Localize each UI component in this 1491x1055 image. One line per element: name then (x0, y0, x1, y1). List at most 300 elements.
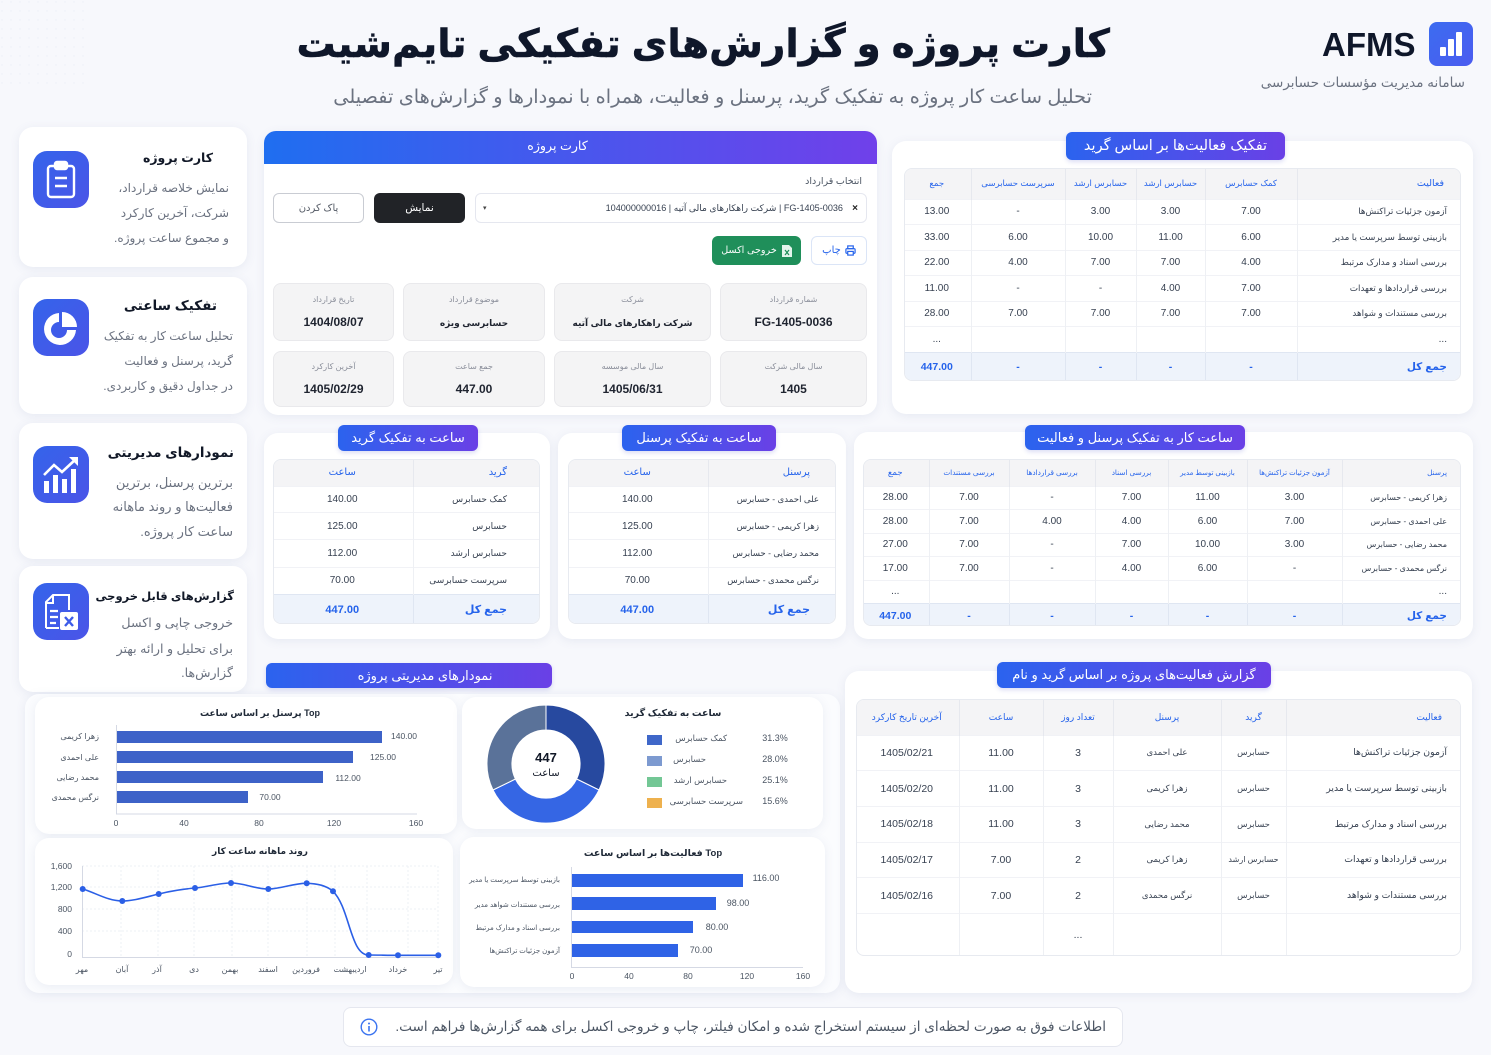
footer text: اطلاعات فوق به صورت لحظه‌ای از سیستم استخراج شده و امکان فیلتر، چاپ و خروجی اکسل برای همه گزارش‌ها فراهم است. (395, 1019, 1106, 1034)
table: hours by personnel and activity: - (1050, 563, 1054, 574)
button: excel export (712, 236, 801, 265)
footer note (343, 1007, 1123, 1047)
table: hours by grade: 70.00 (330, 575, 355, 586)
chart: top activities by hours: بررسی مستندات شواهد مدیر (474, 902, 560, 909)
card description (116, 616, 233, 680)
table: hours by grade (273, 459, 540, 624)
table: activity by grade: 28.00 (924, 308, 949, 319)
info: contract subject: حسابرسی ویژه (440, 318, 508, 328)
button: print: چاپ (822, 245, 841, 256)
table: hours by grade: حسابرس (472, 520, 507, 530)
table: project activity report: 11.00 (988, 818, 1014, 830)
table: hours by grade: 112.00 (327, 548, 357, 559)
table: activity by grade: بررسی اسناد و مدارک مرتبط (1341, 257, 1447, 267)
sidebar card: project card (19, 127, 247, 267)
table: project activity report: زهرا کریمی (1146, 854, 1188, 864)
chart: monthly work hours trend: 800 (58, 904, 72, 914)
chart: monthly work hours trend: مهر (75, 965, 88, 974)
panel: project activity report (845, 671, 1472, 993)
table: hours by grade: سرپرست حسابرسی (429, 575, 507, 585)
table: hours by personnel and activity: - (1293, 563, 1296, 574)
info: contract number: FG-1405-0036 (754, 315, 833, 329)
chart: monthly work hours trend: 1,200 (51, 882, 72, 892)
table: hours by personnel and activity: بازبینی توسط مدیر (1180, 470, 1235, 477)
info: firm fiscal year (554, 351, 711, 407)
table: activity by grade: 11.00 (1158, 232, 1183, 243)
table: project activity report: زهرا کریمی (1146, 783, 1188, 793)
info: company: شرکت (621, 295, 644, 304)
panel: project management charts (25, 694, 840, 993)
chart: monthly work hours trend: 400 (58, 926, 72, 936)
sidebar card: exportable reports (19, 566, 247, 692)
table: hours by personnel: 140.00 (622, 494, 653, 505)
logo icon (1429, 22, 1473, 66)
subtitle: تحلیل ساعت کار پروژه به تفکیک گرید، پرسنل و فعالیت، همراه با نمودارها و گزارش‌های تفصیلی (333, 87, 1092, 108)
chart: hours by grade donut: 447 (535, 750, 557, 765)
table: activity by grade: بازبینی توسط سرپرست یا مدیر (1333, 232, 1447, 242)
card description: شرکت، آخرین کارکرد (121, 206, 229, 220)
button: clear (273, 193, 364, 223)
table: hours by personnel and activity: - (1050, 610, 1054, 622)
icon: clipboard (33, 151, 89, 208)
table: activity by grade: 7.00 (1091, 308, 1110, 319)
panel header: project card (264, 131, 877, 164)
logo caption: سامانه مدیریت مؤسسات حسابرسی (1261, 75, 1465, 90)
table: activity by grade: 6.00 (1241, 232, 1261, 243)
table: hours by personnel: علی احمدی - حسابرس (737, 494, 819, 504)
chart: top activities by hours: 160 (796, 971, 810, 981)
chart: top personnel by hours: محمد رضایی (57, 773, 99, 782)
chart: top activities by hours: بازبینی توسط سرپرست یا مدیر (468, 877, 560, 884)
chart: monthly work hours trend: اسفند (258, 965, 278, 974)
card description: تحلیل ساعت کار به تفکیک (104, 329, 233, 343)
card description: در جداول دقیق و کاربردی. (103, 379, 233, 393)
table: activity by grade: 3.00 (1091, 206, 1110, 217)
table: project activity report: 1405/02/20 (880, 783, 933, 795)
card heading: کارت پروژه (143, 151, 213, 165)
card description: خروجی چاپی و اکسل (121, 616, 233, 630)
table: hours by personnel and activity: 4.00 (1042, 516, 1062, 527)
card description: برای تحلیل و ارائه بهتر (117, 642, 233, 656)
table: hours by personnel (568, 459, 836, 624)
card description: گرید، پرسنل و فعالیت (124, 354, 233, 368)
info: contract date (273, 283, 394, 341)
chart: top personnel by hours (35, 697, 457, 834)
table: hours by grade: 447.00 (325, 604, 359, 616)
info: company fiscal year: سال مالی شرکت (764, 362, 822, 371)
panel: hours by personnel and activity (854, 432, 1473, 639)
table: project activity report: 2 (1075, 854, 1081, 866)
table: hours by personnel and activity: - (1050, 539, 1054, 550)
table: hours by personnel and activity: جمع کل (1407, 610, 1447, 622)
info: total hours (403, 351, 545, 407)
table: hours by personnel and activity: - (1050, 492, 1054, 503)
heading: project management charts: نمودارهای مدیریتی پروژه (358, 668, 492, 682)
table: hours by personnel and activity: - (1130, 610, 1133, 622)
table: hours by personnel and activity: 7.00 (959, 516, 979, 527)
table: hours by personnel and activity: بررسی مستندات (943, 468, 995, 477)
chart: top personnel by hours: 70.00 (259, 792, 281, 802)
chart: hours by grade donut: کمک حسابرس (675, 733, 728, 743)
table: hours by personnel: 70.00 (625, 575, 650, 586)
chart: hours by grade donut: ساعت (532, 768, 560, 779)
chart: top activities by hours: 120 (740, 971, 754, 981)
table: project activity report: ساعت (989, 712, 1013, 722)
contract selector: ▾ (483, 205, 487, 212)
table: project activity report: بازبینی توسط سرپرست یا مدیر (1326, 783, 1447, 793)
table: hours by personnel and activity: 27.00 (883, 539, 908, 550)
table: project activity report: بررسی مستندات و شواهد (1347, 890, 1447, 900)
table: hours by personnel and activity: 11.00 (1195, 492, 1220, 503)
heading: hours by personnel (622, 425, 776, 451)
card description: ساعت کار پروژه. (140, 524, 233, 539)
table: hours by grade: ساعت (329, 467, 356, 478)
heading: project activity report (997, 662, 1271, 688)
heading: hours by personnel and activity (1025, 425, 1245, 450)
table: activity by grade: 11.00 (925, 283, 949, 294)
info: last work (273, 351, 394, 407)
table: project activity report (856, 699, 1461, 956)
table: hours by personnel: نرگس محمدی - حسابرس (727, 575, 819, 585)
table: project activity report: 3 (1075, 818, 1081, 830)
table: hours by personnel and activity: 7.00 (959, 492, 979, 503)
table: activity by grade: 4.00 (1008, 257, 1028, 268)
table: hours by grade: جمع کل (465, 604, 507, 616)
table: project activity report: 1405/02/16 (880, 890, 933, 902)
chart: monthly work hours trend: اردیبهشت (334, 965, 366, 974)
chart: monthly work hours trend: 0 (67, 949, 72, 959)
info: contract date: 1404/08/07 (303, 315, 364, 329)
table: hours by personnel and activity: 3.00 (1285, 492, 1304, 503)
table: hours by personnel and activity: پرسنل (1427, 468, 1447, 477)
table: hours by personnel and activity: علی احمدی - حسابرس (1370, 517, 1447, 526)
table: project activity report: حسابرس (1237, 783, 1270, 793)
chart: hours by grade donut: 25.1% (762, 775, 788, 785)
table: activity by grade: 7.00 (1241, 308, 1261, 319)
chart: top activities by hours: 80.00 (706, 922, 728, 932)
card description: برترین پرسنل، برترین (116, 475, 233, 490)
panel: hours by grade (264, 433, 550, 639)
table: hours by grade: حسابرس ارشد (451, 548, 507, 558)
table: activity by grade: 22.00 (924, 257, 949, 268)
heading: hours by grade (338, 425, 478, 451)
chart: top personnel by hours: 140.00 (391, 731, 417, 741)
chart: top activities by hours: Top فعالیت‌ها بر اساس ساعت (584, 848, 722, 859)
table: activity by grade: جمع کل (1407, 361, 1447, 373)
table: project activity report: 7.00 (991, 854, 1011, 866)
chart: monthly work hours trend: 1,600 (51, 861, 72, 871)
table: hours by personnel and activity: ... (1439, 586, 1447, 597)
table: project activity report: 11.00 (988, 747, 1014, 759)
table: activity by grade: بررسی مستندات و شواهد (1352, 308, 1447, 318)
chart: top activities by hours: 40 (624, 971, 634, 981)
table: activity by grade: - (1249, 361, 1253, 373)
panel: activity by grade (892, 141, 1473, 414)
table: activity by grade: 447.00 (921, 361, 953, 373)
heading: activity by grade (1066, 132, 1285, 160)
logo: AFMS brand (1261, 22, 1473, 90)
table: project activity report: بررسی اسناد و مدارک مرتبط (1335, 819, 1447, 829)
table: activity by grade: 7.00 (1008, 308, 1028, 319)
table: hours by grade: گرید (489, 467, 507, 478)
table: hours by personnel and activity: آزمون جزئیات تراکنش‌ها (1259, 470, 1330, 477)
heading: project activity report: گزارش فعالیت‌های پروژه بر اساس گرید و نام (1012, 667, 1256, 682)
info: company fiscal year (720, 351, 867, 407)
table: hours by personnel and activity: محمد رضایی - حسابرس (1366, 540, 1447, 549)
contract selector: × (852, 203, 858, 214)
chart: top personnel by hours: علی احمدی (60, 753, 99, 762)
table: hours by personnel and activity (863, 459, 1461, 626)
table: hours by personnel: 112.00 (622, 548, 652, 559)
info: firm fiscal year: 1405/06/31 (602, 382, 663, 396)
table: activity by grade: سرپرست حسابرسی (981, 178, 1055, 188)
table: hours by personnel and activity: 7.00 (959, 563, 979, 574)
table: hours by personnel and activity: 17.00 (883, 563, 908, 574)
chart: top activities by hours: 98.00 (727, 898, 749, 908)
chart: monthly work hours trend: خرداد (389, 965, 407, 974)
contract selector: FG-1405-0036 | شرکت راهکارهای مالی آتیه | 104000000016 (606, 203, 843, 213)
table: project activity report: 3 (1075, 747, 1081, 759)
table: activity by grade: کمک حسابرس (1225, 178, 1277, 188)
table: hours by personnel and activity: 3.00 (1285, 539, 1304, 550)
info: company: شرکت راهکارهای مالی آتیه (573, 318, 692, 328)
info: contract subject (403, 283, 545, 341)
table: activity by grade: 7.00 (1161, 257, 1180, 268)
chart: monthly work hours trend (35, 838, 453, 985)
chart: top activities by hours: 80 (683, 971, 693, 981)
table: project activity report: نرگس محمدی (1142, 890, 1192, 900)
table: project activity report: گرید (1245, 712, 1262, 722)
table: hours by personnel and activity: 7.00 (1285, 516, 1304, 527)
chart: hours by grade donut: حسابرس ارشد (674, 775, 727, 785)
info: contract number (720, 283, 867, 341)
card heading: تفکیک ساعتی (124, 298, 217, 313)
panel: project card (264, 131, 877, 415)
button: print (811, 236, 867, 265)
table: hours by personnel and activity: 7.00 (1122, 492, 1141, 503)
table: project activity report: پرسنل (1155, 712, 1179, 722)
chart: monthly work hours trend: بهمن (222, 965, 238, 974)
table: hours by personnel: زهرا کریمی - حسابرس (737, 520, 819, 530)
contract selector label: انتخاب قرارداد (805, 176, 862, 187)
table: activity by grade: 7.00 (1241, 206, 1261, 217)
table: activity by grade: 4.00 (1161, 283, 1180, 294)
info: contract number: شماره قرارداد (770, 295, 817, 304)
table: activity by grade: 10.00 (1088, 232, 1113, 243)
table: project activity report: حسابرس ارشد (1228, 855, 1279, 864)
table: activity by grade: - (1099, 283, 1102, 294)
chart: hours by grade donut (462, 697, 823, 829)
table: hours by personnel and activity: 4.00 (1122, 516, 1141, 527)
heading: hours by grade: ساعت به تفکیک گرید (351, 430, 465, 445)
table: hours by personnel: محمد رضایی - حسابرس (732, 548, 819, 558)
table: hours by personnel and activity: 6.00 (1198, 516, 1217, 527)
chart: top activities by hours (460, 837, 825, 987)
card heading: گزارش‌های قابل خروجی (96, 591, 234, 603)
table: activity by grade: حسابرس ارشد (1074, 178, 1127, 188)
chart: monthly work hours trend: آبان (116, 964, 129, 974)
chart: monthly work hours trend: تیر (432, 965, 443, 974)
table: hours by personnel and activity: 10.00 (1195, 539, 1220, 550)
table: activity by grade: 13.00 (924, 206, 949, 217)
table: project activity report: ... (1074, 929, 1082, 941)
chart: top personnel by hours: 0 (114, 818, 119, 828)
table: hours by personnel and activity: 4.00 (1122, 563, 1141, 574)
table: activity by grade: 7.00 (1091, 257, 1110, 268)
chart: top personnel by hours: 112.00 (335, 773, 361, 783)
card heading: نمودارهای مدیریتی (108, 445, 234, 460)
table: project activity report: 1405/02/21 (880, 747, 933, 759)
table: activity by grade: 7.00 (1241, 283, 1261, 294)
icon: excel document (33, 583, 89, 640)
sidebar card: management charts (19, 423, 247, 559)
chart: top activities by hours: 0 (570, 971, 575, 981)
card description: گزارش‌ها. (181, 666, 233, 680)
table: hours by personnel and activity: 7.00 (959, 539, 979, 550)
table: project activity report: فعالیت (1416, 712, 1442, 722)
table: hours by personnel and activity: 28.00 (883, 516, 908, 527)
table: project activity report: حسابرس (1237, 747, 1270, 757)
button: clear: پاک کردن (299, 202, 338, 214)
contract selector (475, 193, 867, 223)
chart: top personnel by hours: 40 (179, 818, 189, 828)
chart: hours by grade donut: 31.3% (762, 733, 788, 743)
card description (113, 475, 233, 540)
info: contract date: تاریخ قرارداد (313, 295, 354, 304)
chart: top personnel by hours: Top پرسنل بر اساس ساعت (200, 708, 320, 719)
table: activity by grade: بررسی قراردادها و تعهدات (1350, 283, 1447, 293)
table: activity by grade: فعالیت (1417, 178, 1444, 189)
table: project activity report: 7.00 (991, 890, 1011, 902)
table: project activity report: 2 (1075, 890, 1081, 902)
heading: hours by personnel: ساعت به تفکیک پرسنل (636, 430, 762, 445)
heading: project management charts (266, 663, 552, 688)
table: hours by personnel and activity: ... (891, 586, 899, 597)
table: hours by personnel and activity: - (1293, 610, 1296, 622)
chart: top personnel by hours: 125.00 (370, 752, 396, 762)
chart: hours by grade donut: حسابرس (673, 754, 706, 764)
table: hours by personnel and activity: نرگس محمدی - حسابرس (1362, 564, 1447, 573)
table: project activity report: حسابرس (1237, 890, 1270, 900)
chart: top activities by hours: 70.00 (690, 945, 712, 955)
table: hours by personnel and activity: بررسی اسناد (1112, 468, 1151, 477)
table: activity by grade: - (1099, 361, 1102, 373)
chart: hours by grade donut: 15.6% (762, 796, 788, 806)
chart: top activities by hours: بررسی اسناد و مدارک مرتبط (475, 924, 560, 932)
table: activity by grade: 3.00 (1161, 206, 1180, 217)
table: hours by personnel: جمع کل (768, 604, 810, 616)
chart: hours by grade donut: 28.0% (762, 754, 788, 764)
table: hours by personnel: پرسنل (783, 467, 810, 478)
table: project activity report: حسابرس (1237, 819, 1270, 829)
table: project activity report: آخرین تاریخ کارکرد (872, 712, 942, 722)
info: company fiscal year: 1405 (780, 382, 807, 396)
table: hours by grade: کمک حسابرس (452, 494, 507, 504)
info: firm fiscal year: سال مالی موسسه (602, 362, 663, 371)
table: hours by personnel: 447.00 (620, 604, 654, 616)
table: project activity report: آزمون جزئیات تراکنش‌ها (1353, 747, 1447, 757)
table: project activity report: 1405/02/17 (880, 854, 933, 866)
table: project activity report: 11.00 (988, 783, 1014, 795)
card description: فعالیت‌ها و روند ماهانه (113, 499, 233, 514)
button: show: نمایش (405, 202, 434, 214)
chart: monthly work hours trend: آذر (151, 964, 163, 974)
table: project activity report: 3 (1075, 783, 1081, 795)
table: project activity report: محمد رضایی (1144, 819, 1190, 829)
button: show (374, 193, 465, 223)
chart: top personnel by hours: 80 (254, 818, 264, 828)
table: hours by personnel and activity: 7.00 (1122, 539, 1141, 550)
info: total hours: 447.00 (456, 382, 492, 396)
table: hours by personnel and activity: 6.00 (1198, 563, 1217, 574)
table: hours by personnel and activity: جمع (888, 467, 903, 477)
table: project activity report: بررسی قراردادها و تعهدات (1344, 854, 1447, 864)
info: last work: آخرین کارکرد (311, 362, 356, 371)
icon: pie chart (33, 299, 89, 356)
chart: monthly work hours trend: دی (189, 965, 199, 974)
chart: top personnel by hours: زهرا کریمی (60, 732, 99, 741)
chart: top personnel by hours: 120 (327, 818, 341, 828)
table: hours by personnel and activity: بررسی قراردادها (1026, 468, 1078, 477)
table: hours by personnel and activity: - (1206, 610, 1209, 622)
card description: نمایش خلاصه قرارداد، (118, 181, 229, 195)
heading: hours by personnel and activity: ساعت کار به تفکیک پرسنل و فعالیت (1037, 430, 1233, 444)
table: activity by grade: - (1016, 361, 1020, 373)
table: hours by personnel: ساعت (624, 467, 651, 478)
table: hours by personnel and activity: زهرا کریمی - حسابرس (1370, 493, 1447, 502)
info: contract subject: موضوع قرارداد (449, 295, 499, 304)
table: hours by grade: 140.00 (327, 494, 358, 505)
table: activity by grade: 33.00 (924, 232, 949, 243)
logo wordmark: AFMS (1322, 26, 1416, 63)
table: activity by grade: حسابرس ارشد (1144, 178, 1197, 188)
table: activity by grade: 6.00 (1008, 232, 1028, 243)
button: excel export: خروجی اکسل (721, 245, 777, 256)
panel header: project card: کارت پروژه (527, 139, 588, 153)
panel: hours by personnel (558, 433, 846, 639)
card description (114, 181, 229, 245)
icon: rising bar chart (33, 446, 89, 503)
table: hours by personnel and activity: 447.00 (879, 610, 911, 622)
heading: activity by grade: تفکیک فعالیت‌ها بر اساس گرید (1084, 138, 1267, 154)
table: hours by personnel and activity: 28.00 (883, 492, 908, 503)
table: activity by grade: ... (933, 334, 941, 345)
info: last work: 1405/02/29 (303, 382, 364, 396)
table: project activity report: 1405/02/18 (880, 818, 933, 830)
chart: top activities by hours: 116.00 (753, 873, 779, 883)
table: activity by grade (904, 168, 1461, 381)
table: hours by personnel and activity: - (967, 610, 971, 622)
chart: hours by grade donut: سرپرست حسابرسی (670, 796, 743, 806)
title: کارت پروژه و گزارش‌های تفکیکی تایم‌شیت (296, 23, 1110, 66)
info: total hours: جمع ساعت (455, 362, 493, 371)
chart: top personnel by hours: نرگس محمدی (52, 792, 99, 802)
sidebar card: time breakdown (19, 277, 247, 414)
table: activity by grade: - (1016, 206, 1020, 217)
icon: info (360, 1018, 378, 1036)
table: activity by grade: 4.00 (1241, 257, 1261, 268)
table: activity by grade: - (1169, 361, 1172, 373)
table: activity by grade: ... (1439, 334, 1447, 345)
chart: monthly work hours trend: فروردین (292, 965, 320, 974)
info: company (554, 283, 711, 341)
table: activity by grade: - (1016, 283, 1020, 294)
table: activity by grade: 7.00 (1161, 308, 1180, 319)
table: project activity report: تعداد روز (1061, 712, 1095, 722)
card description: و مجموع ساعت پروژه. (114, 231, 229, 245)
table: activity by grade: آزمون جزئیات تراکنش‌ها (1358, 206, 1447, 216)
chart: top personnel by hours: 160 (409, 818, 423, 828)
